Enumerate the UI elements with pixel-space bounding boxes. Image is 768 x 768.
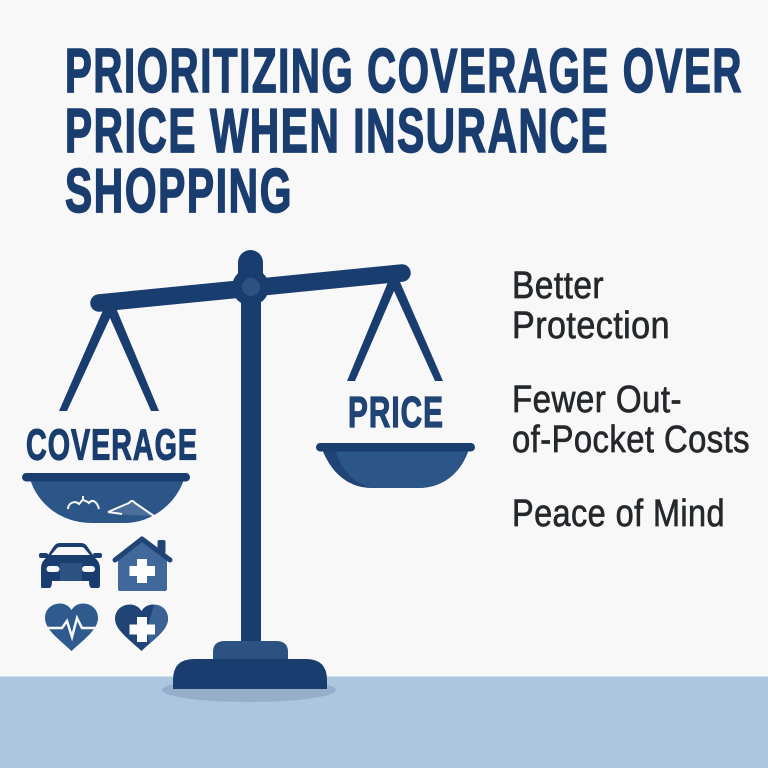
title: SHOPPING — [65, 157, 293, 226]
label: price: PRICE — [348, 388, 444, 437]
benefit: better protection: Protection — [512, 305, 670, 347]
scale post — [241, 270, 261, 645]
icon: heart with pulse — [45, 604, 98, 651]
scale beam — [99, 273, 402, 303]
right pan strings — [347, 282, 443, 381]
benefit: fewer out-of-pocket costs: Fewer Out- — [512, 379, 682, 421]
benefit: fewer out-of-pocket costs — [512, 379, 750, 461]
title — [65, 37, 743, 226]
left pan strings — [59, 308, 159, 411]
benefit: better protection: Better — [512, 265, 604, 307]
icon: house with cross — [115, 539, 170, 591]
pivot hub — [232, 268, 269, 306]
icon: car — [39, 543, 102, 588]
scale base — [173, 641, 327, 689]
label: coverage: COVERAGE — [26, 420, 198, 470]
right pan — [316, 443, 475, 488]
balance scale — [22, 250, 475, 702]
benefit: peace of mind: Peace of Mind — [512, 493, 725, 535]
benefit: better protection — [512, 265, 670, 347]
left pan — [22, 473, 190, 523]
scale post knob — [238, 250, 263, 300]
icon: heart with cross — [115, 604, 168, 651]
benefits list — [512, 265, 750, 535]
scale base shadow — [162, 678, 336, 702]
ground band — [0, 676, 768, 768]
